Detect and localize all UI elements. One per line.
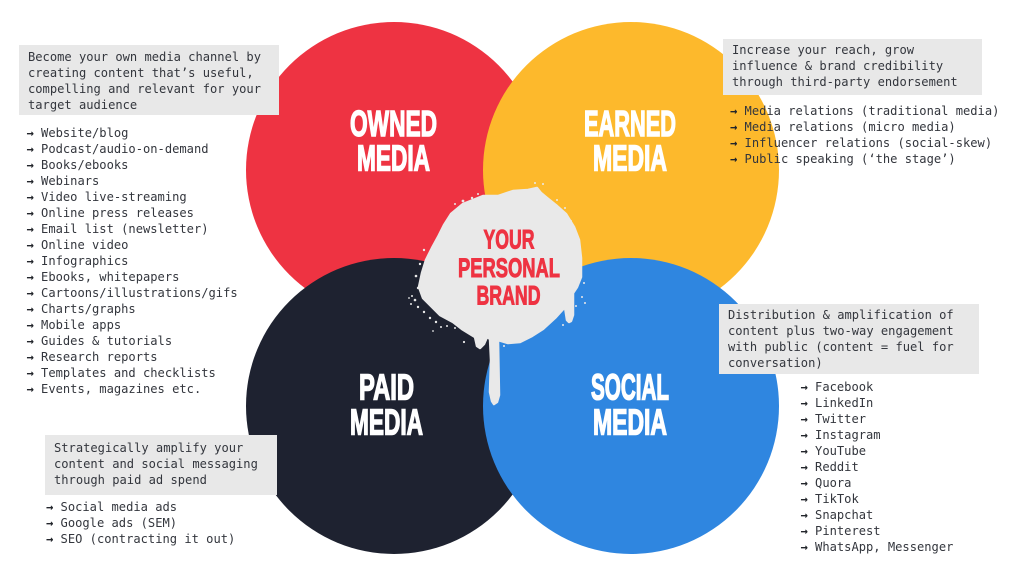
heading: social media [591, 366, 669, 442]
heading: paid media: PAID [359, 366, 414, 408]
circle: paid media [246, 258, 542, 554]
heading: social media: MEDIA [593, 402, 667, 442]
panel: paid media description [45, 435, 277, 495]
heading: your personal brand: BRAND [476, 280, 540, 310]
paint splat: centre [408, 182, 586, 404]
heading: paid media [350, 366, 423, 442]
panel: owned media description: Become your own media channel by creating content that’s useful, compelling and relevant for your target audience [28, 50, 261, 112]
circle: earned media [483, 22, 779, 318]
circle: social media [483, 258, 779, 554]
heading: earned media: MEDIA [593, 138, 667, 178]
heading: paid media: MEDIA [350, 402, 423, 442]
circle: owned media [246, 22, 542, 318]
panel: earned media description: Increase your reach, grow influence & brand credibility through third-party endorsement [732, 43, 958, 89]
heading: earned media [584, 103, 676, 178]
list: earned media tactics: → Media relations (traditional media) → Media relations (micro media) → Influencer relations (social-skew) → Public speaking (‘the stage’) [730, 104, 999, 166]
heading: your personal brand: YOUR [484, 224, 534, 254]
heading: owned media: MEDIA [357, 138, 430, 178]
heading: your personal brand: PERSONAL [458, 253, 560, 283]
heading: your personal brand [458, 224, 560, 310]
heading: owned media: OWNED [350, 103, 437, 144]
heading: social media: SOCIAL [591, 366, 669, 408]
panel: paid media description: Strategically amplify your content and social messaging through paid ad spend [54, 441, 258, 487]
panel: social media description: Distribution & amplification of content plus two-way engagement with public (content = fuel for conversation) [728, 308, 954, 370]
list: paid media tactics: → Social media ads → Google ads (SEM) → SEO (contracting it out) [46, 500, 235, 546]
heading: earned media: EARNED [584, 103, 676, 144]
list: social media platforms: → Facebook → LinkedIn → Twitter → Instagram → YouTube → Reddit → Quora → TikTok → Snapchat → Pinterest → WhatsApp, Messenger [800, 380, 953, 554]
list: owned media tactics: → Website/blog → Podcast/audio-on-demand → Books/ebooks → Webinars → Video live-streaming → Online press releases → Email list (newsletter) → Online video → Infographics → Ebooks, whitepapers → Cartoons/illustrations/gifs → Charts/graphs → Mobile apps → Guides & tutorials → Research reports → Templates and checklists → Events, magazines etc. [26, 126, 238, 396]
heading: owned media [350, 103, 437, 178]
